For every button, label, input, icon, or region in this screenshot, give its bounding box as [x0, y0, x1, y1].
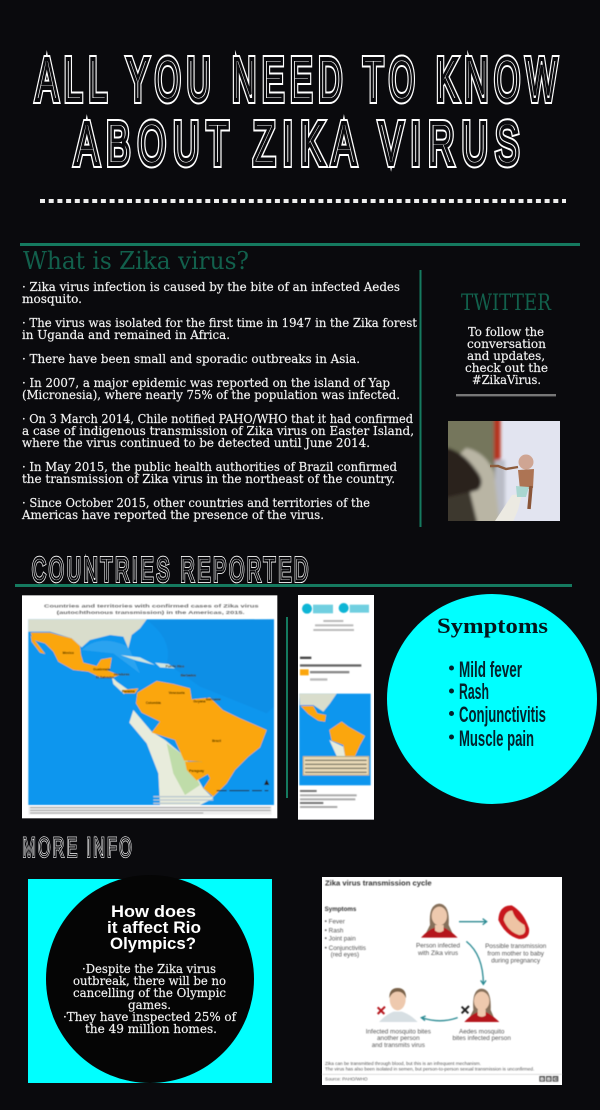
heading: more info: MORE INFO [23, 832, 132, 863]
chart footnote: Source: PAHO/WHO [325, 1077, 368, 1082]
text block: Zika facts [21, 279, 417, 522]
chart captions: Possible transmission [485, 943, 547, 950]
title: ABOUT ZIKA VIRUS [75, 112, 519, 177]
panel: twitter [461, 291, 552, 387]
text block: Zika facts: where the virus continued to be detected until June 2014. [22, 435, 370, 450]
list: symptoms: Mild fever [459, 657, 522, 682]
text block: Rio Olympics facts: games. [128, 997, 171, 1012]
text block: Rio Olympics facts: outbreak, there will be no [73, 973, 226, 988]
heading: twitter: TWITTER [461, 291, 552, 316]
icon: infected woman [421, 904, 458, 938]
map country labels: Mexico [63, 651, 74, 655]
map country labels: Brazil [212, 739, 221, 743]
heading: Rio Olympics question: How does [111, 902, 196, 921]
arrow: infected person to mosquito bite [466, 941, 486, 984]
heading: countries reported: COUNTRIES REPORTED [32, 552, 308, 588]
chart captions: from mother to baby [487, 950, 545, 957]
text block: twitter call to action: and updates, [467, 348, 545, 363]
icon: woman bitten [464, 989, 499, 1022]
text block: twitter call to action: check out the [465, 360, 548, 375]
text block: Zika facts: (Micronesia), where nearly 75% of the population was infected. [22, 387, 400, 402]
text block: Zika facts: mosquito. [22, 291, 82, 306]
map title [44, 604, 259, 616]
map country labels: Colombia [146, 701, 161, 705]
text block: Zika facts: in Uganda and remained in Africa. [22, 327, 230, 342]
text block: Zika facts: Americas have reported the presence of the virus. [21, 507, 324, 522]
chart footnote: The virus has also been isolated in semen, but person-to-person sexual transmission is unconfirmed. [325, 1066, 534, 1071]
map country labels: Guatemala [93, 668, 110, 672]
chart symptoms list: • Rash [325, 927, 344, 934]
icon: mosquito black [462, 1006, 469, 1013]
text block: twitter call to action: #ZikaVirus. [472, 372, 541, 387]
BBC logo: C [554, 1077, 558, 1082]
chart symptoms list: Symptoms [325, 906, 357, 913]
logos [302, 603, 369, 614]
heading: countries reported: COUNTRIES REPORTED [32, 552, 308, 588]
icon: mosquito red [378, 1007, 385, 1014]
chart captions: with Zika virus [417, 950, 458, 957]
map country labels: Paraguay [189, 769, 204, 773]
map country labels: Venezuela [169, 691, 185, 695]
text block: Zika facts: · On 3 March 2014, Chile notified PAHO/WHO that it had confirmed [22, 411, 413, 426]
text block: twitter call to action [465, 324, 548, 387]
map title: (autochthonous transmission) in the Americas, 2015. [57, 610, 246, 616]
map country labels [63, 651, 221, 773]
heading: more info: MORE INFO [23, 832, 132, 863]
text block: Zika facts: · There have been small and sporadic outbreaks in Asia. [22, 351, 360, 366]
text block: Rio Olympics facts: ·Despite the Zika virus [82, 961, 216, 976]
chart captions: bites infected person [452, 1035, 511, 1042]
panel: symptoms [387, 594, 597, 804]
text block: Zika facts: · In 2007, a major epidemic was reported on the island of Yap [22, 375, 390, 390]
chart symptoms list: • Fever [325, 919, 345, 926]
icon: man [379, 988, 418, 1022]
map title: Countries and territories with confirmed cases of Zika virus [44, 604, 259, 610]
icon: fetus in womb [498, 905, 529, 939]
heading: symptoms: Symptoms [437, 613, 548, 638]
list: symptoms [449, 657, 546, 751]
title: ALL YOU NEED TO KNOW [36, 48, 557, 114]
chart title: Zika virus transmission cycle [325, 879, 432, 888]
list: symptoms: Rash [459, 679, 489, 704]
BBC logo: B [547, 1077, 551, 1082]
chart captions: another person [377, 1035, 420, 1042]
title: ALL YOU NEED TO KNOW [36, 48, 557, 114]
chart symptoms list [325, 906, 366, 959]
chart symptoms list: (red eyes) [331, 952, 359, 959]
arrow: mother to baby [459, 919, 487, 925]
BBC logo: B [540, 1077, 544, 1082]
title [36, 48, 557, 177]
text block: Zika facts: · Since October 2015, other countries and territories of the [22, 495, 370, 510]
map country labels: El Salvador [96, 676, 115, 680]
chart footnote: Zika can be transmitted through blood, but this is an infrequent mechanism. [325, 1061, 481, 1066]
chart captions: Infected mosquito bites [366, 1028, 431, 1035]
chart footnote [325, 1061, 534, 1082]
text block: Zika facts: a case of indigenous transmission of Zika virus on Easter Island, [22, 423, 414, 438]
photo: baby with microcephaly [448, 421, 560, 521]
chart captions [366, 943, 547, 1049]
map: PAHO legend panel [298, 595, 374, 820]
title: ABOUT ZIKA VIRUS [75, 112, 519, 177]
text block: Rio Olympics facts: ·They have inspected 25% of [63, 1009, 237, 1024]
map country labels: Guyana [193, 699, 206, 703]
map country labels: Puerto Rico [166, 664, 184, 668]
chart captions: Person infected [416, 943, 460, 950]
text block: twitter call to action: conversation [467, 336, 546, 351]
map: confirmed cases in the Americas [22, 595, 277, 818]
text block: Zika facts: · Zika virus infection is caused by the bite of an infected Aedes [22, 279, 400, 294]
heading: Rio Olympics question: it affect Rio [107, 918, 201, 937]
chart symptoms list: • Conjunctivitis [325, 945, 366, 952]
BBC logo [539, 1076, 558, 1082]
heading: what is Zika virus: What is Zika virus? [23, 247, 249, 275]
text block: Zika facts: · In May 2015, the public health authorities of Brazil confirmed [22, 459, 397, 474]
list: symptoms: Muscle pain [459, 726, 534, 751]
map country labels: Honduras [114, 672, 130, 676]
chart captions: and transmits virus [372, 1042, 425, 1049]
map country labels: Panama [122, 689, 135, 693]
chart symptoms list: • Joint pain [325, 936, 356, 943]
text block: Rio Olympics facts [63, 961, 237, 1036]
map country labels: Barbados [181, 674, 196, 678]
panel: Rio Olympics [28, 875, 272, 1083]
text block: Zika facts: the transmission of Zika virus in the northeast of the country. [22, 471, 395, 486]
text block: Rio Olympics facts: the 49 million homes. [85, 1021, 217, 1036]
chart captions: Aedes mosquito [459, 1028, 505, 1035]
heading: Rio Olympics question: Olympics? [110, 934, 196, 953]
text block: Zika facts: · The virus was isolated for the first time in 1947 in the Zika forest [22, 315, 417, 330]
chart captions: during pregnancy [491, 957, 541, 964]
map country labels: Suriname [206, 698, 221, 702]
text block: twitter call to action: To follow the [468, 324, 544, 339]
chart: Zika virus transmission cycle [322, 877, 562, 1085]
text block: Rio Olympics facts: cancelling of the Olympic [73, 985, 226, 1000]
heading: Rio Olympics question [107, 902, 201, 953]
arrow: mosquito to another person [421, 1016, 458, 1021]
